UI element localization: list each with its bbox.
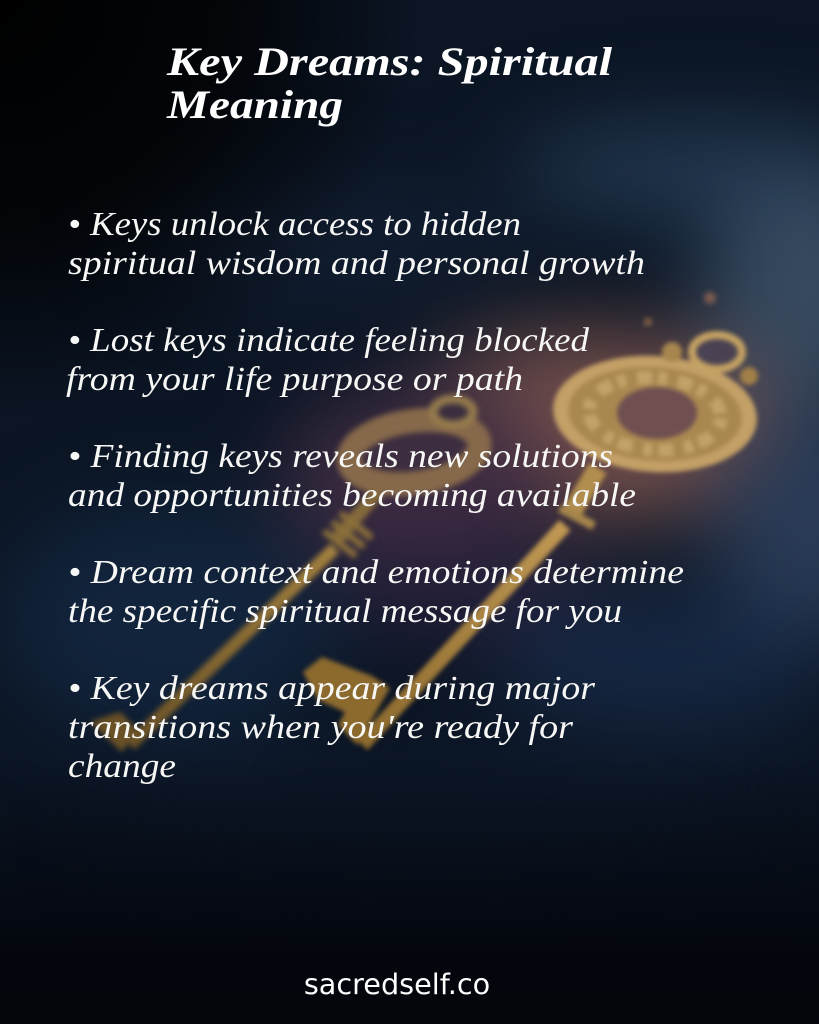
bullet: transitions: transitions when you're ready for <box>68 709 574 746</box>
bullet: finding keys <box>68 438 636 514</box>
bullet: lost keys: • Lost keys indicate feeling blocked <box>68 322 590 359</box>
bullet: transitions: • Key dreams appear during major <box>68 670 596 707</box>
icon: left key <box>90 399 484 752</box>
title <box>166 39 613 127</box>
bullet: hidden wisdom: • Keys unlock access to hidden <box>68 206 521 243</box>
bullet: lost keys <box>66 322 590 398</box>
title: Meaning <box>166 82 343 127</box>
bullet: transitions <box>68 670 596 785</box>
bullet: dream context: the specific spiritual message for you <box>68 593 622 630</box>
text block: bullet list <box>66 206 684 785</box>
icon: right key <box>303 335 761 745</box>
bullet: hidden wisdom <box>68 206 645 282</box>
bullet: finding keys: • Finding keys reveals new solutions <box>68 438 613 475</box>
bullet: finding keys: and opportunities becoming available <box>68 477 636 514</box>
footer: website: sacredself.co <box>304 967 490 1001</box>
bullet: dream context <box>68 554 684 630</box>
title: Key Dreams: Spiritual <box>166 39 613 84</box>
bullet: dream context: • Dream context and emotions determine <box>68 554 684 591</box>
bullet: lost keys: from your life purpose or path <box>66 361 523 398</box>
bullet: hidden wisdom: spiritual wisdom and personal growth <box>68 245 645 282</box>
bullet: transitions: change <box>68 748 176 785</box>
